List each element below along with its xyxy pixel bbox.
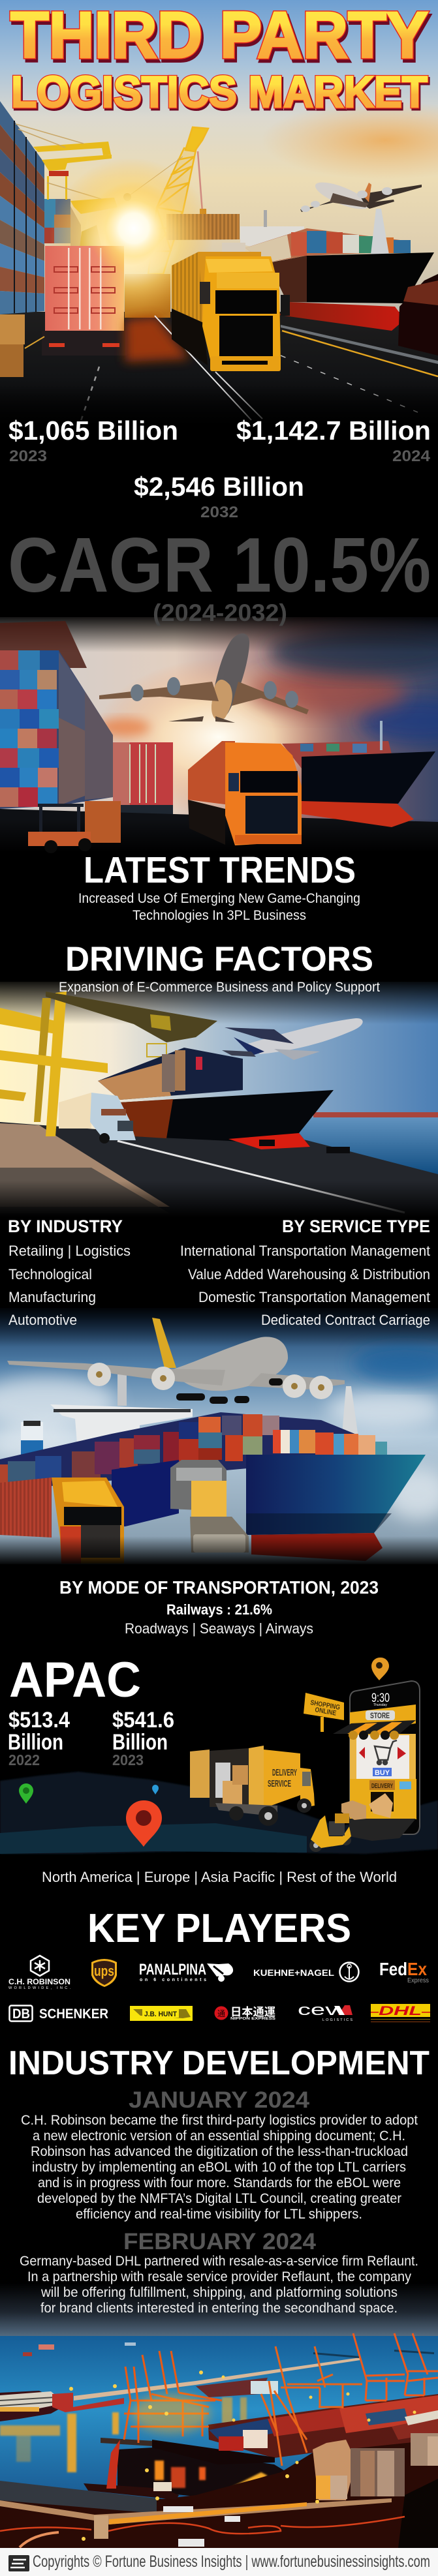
quay wall <box>0 2481 157 2513</box>
segment: by industry: BY INDUSTRY <box>8 1217 123 1236</box>
panel: harbour at night <box>0 2283 438 2548</box>
value 2023 <box>8 416 178 465</box>
map silhouette <box>0 1772 438 1854</box>
silos <box>313 2433 438 2500</box>
illustration: shopping online sign: ONLINE <box>314 1706 337 1718</box>
airplane <box>99 633 309 723</box>
panel: sunset logistics scene <box>0 613 438 853</box>
pin blue <box>152 1785 159 1795</box>
illustration: delivery truck: DELIVERY <box>272 1767 297 1778</box>
locomotive <box>170 1460 249 1553</box>
value 2032: $2,546 Billion <box>134 472 304 502</box>
service type list <box>180 1243 430 1328</box>
illustration: scooter <box>309 1813 351 1852</box>
road markings <box>25 316 438 421</box>
APAC value 2023: 2023 <box>112 1751 144 1768</box>
February paragraph <box>20 2254 418 2316</box>
logo: DB Schenker <box>9 2005 108 2022</box>
gantry crane <box>0 992 217 1136</box>
illustration: phone store <box>333 1658 420 1841</box>
bridge pier <box>94 2515 108 2539</box>
distant trucks <box>125 274 170 318</box>
segment: by service type <box>180 1217 430 1328</box>
yard containers <box>209 2395 438 2443</box>
store button: STORE <box>370 1711 390 1720</box>
sun glow <box>95 659 343 815</box>
right middle cranes <box>261 2346 362 2466</box>
logos <box>8 1956 430 2022</box>
ship containers <box>245 209 411 263</box>
logo: FedEx <box>379 1959 429 1984</box>
red clouds <box>248 669 405 714</box>
bottom fade <box>0 1181 438 1217</box>
top fade <box>0 978 438 1024</box>
illustration: delivery truck <box>190 1746 315 1826</box>
fade into black <box>0 385 438 431</box>
service type list: Domestic Transportation Management <box>198 1289 430 1305</box>
red trailer <box>113 742 173 822</box>
logo: J.B. Hunt <box>130 2006 193 2021</box>
bollards <box>259 1140 350 1153</box>
title <box>10 0 430 119</box>
APAC value 2022 <box>8 1708 70 1768</box>
footer background <box>0 2548 438 2576</box>
value 2032: 2032 <box>200 504 238 521</box>
clock <box>371 1691 390 1707</box>
February paragraph: In a partnership with resale service provider Reflaunt, the company <box>27 2269 411 2284</box>
logo: UPS <box>91 1959 117 1987</box>
segment: by service type: BY SERVICE TYPE <box>282 1217 430 1236</box>
industry list: Retailing | Logistics <box>8 1243 131 1259</box>
industry list: Technological <box>8 1266 92 1282</box>
shop window <box>356 1735 409 1779</box>
driving factor description: Expansion of E-Commerce Business and Policy Support <box>59 980 380 995</box>
small ships <box>23 2342 136 2356</box>
pontoon <box>101 2438 153 2446</box>
map lower glow <box>0 1823 307 1854</box>
distant stack <box>44 199 81 249</box>
January paragraph: industry by implementing an eBOL with 10 of the top LTL carriers <box>32 2160 406 2175</box>
truck cab <box>52 1477 124 1564</box>
sky <box>0 982 438 1132</box>
harbour lights <box>69 2371 416 2541</box>
second vessel right <box>398 274 438 356</box>
APAC value 2022: 2022 <box>8 1751 40 1768</box>
dock surface <box>0 1122 438 1220</box>
railways share: Railways : 21.6% <box>166 1601 272 1618</box>
logo: UPS: ups <box>94 1963 114 1979</box>
panel: hero port scene <box>0 0 438 431</box>
gantry crane yellow <box>16 124 117 248</box>
development: February 2024: FEBRUARY 2024 <box>123 2229 317 2254</box>
region heading: APAC <box>8 1652 174 1768</box>
development: January 2024: JANUARY 2024 <box>129 2087 310 2113</box>
land <box>0 2440 438 2548</box>
road <box>0 312 438 431</box>
location pin <box>371 1658 389 1680</box>
value 2024: $1,142.7 Billion <box>236 416 431 446</box>
white ship on pier <box>251 2381 278 2394</box>
heading: key players: KEY PLAYERS <box>87 1906 351 1951</box>
title line 1: THIRD PARTY <box>12 2 430 75</box>
road base <box>0 809 438 851</box>
forklift and crates <box>28 801 121 853</box>
logo: Nippon Express: 通 <box>217 2009 225 2018</box>
panel: cargo ship, train, truck and plane scene <box>0 1305 438 1577</box>
sun over trailer <box>87 181 181 275</box>
transport modes: Roadways | Seaways | Airways <box>125 1620 313 1637</box>
top fade <box>0 613 438 652</box>
development: February 2024 <box>20 2229 418 2316</box>
logo: J.B. Hunt: J.B. HUNT <box>144 2010 177 2018</box>
February paragraph: will be offering fulfillment, shipping, and platforming solutions <box>40 2285 398 2300</box>
panel: world map base <box>0 1772 438 1854</box>
delivery tag <box>369 1780 395 1790</box>
distant train <box>313 1112 438 1117</box>
logo: Nippon Express: NIPPON EXPRESS <box>230 2017 275 2021</box>
ship hull <box>120 1090 334 1147</box>
segment: mode of transportation <box>59 1577 379 1637</box>
small vessel <box>84 2440 179 2500</box>
water reflections <box>0 2397 247 2472</box>
trucks on road <box>163 2506 240 2547</box>
airplane <box>300 177 422 215</box>
heading: driving factors: DRIVING FACTORS <box>65 940 373 978</box>
heading: latest trends <box>78 849 360 923</box>
centre reflection shadow <box>117 2447 287 2498</box>
centre reflections <box>155 2461 268 2493</box>
store header <box>350 1705 416 1735</box>
pier containers <box>52 2393 124 2412</box>
sky <box>0 0 438 326</box>
phone body <box>350 1681 420 1834</box>
red arrows <box>359 1747 406 1759</box>
February paragraph: for brand clients interested in entering the secondhand space. <box>40 2301 398 2316</box>
container stack left <box>0 101 44 314</box>
January paragraph: efficiency and real-time visibility for LTL shippers. <box>76 2207 362 2222</box>
logo: DB Schenker: SCHENKER <box>39 2007 108 2022</box>
industry list: Manufacturing <box>8 1289 96 1305</box>
red trailer <box>0 1477 52 1538</box>
APAC value 2023: Billion <box>112 1730 168 1755</box>
logo: C.H. Robinson <box>8 1956 70 1990</box>
quay shadow <box>0 1168 170 1213</box>
sky <box>0 1308 438 1566</box>
quay kerb <box>281 325 438 364</box>
heading: driving factors <box>59 940 380 995</box>
top fade <box>0 1305 438 1347</box>
logo: DHL <box>371 2004 430 2022</box>
hull red bow <box>228 1133 310 1149</box>
shopping cart <box>375 1740 397 1765</box>
delivery tag: DELIVERY <box>371 1783 393 1790</box>
moored tanker <box>152 2430 275 2464</box>
road line <box>117 1141 405 1213</box>
illustration: shopping online sign: SHOPPING <box>309 1699 341 1712</box>
footer <box>0 2548 438 2576</box>
ground <box>0 1564 438 1577</box>
ship superstructure <box>222 210 304 256</box>
trend description: Increased Use Of Emerging New Game-Changing <box>78 891 360 906</box>
parcel tilted <box>369 1793 393 1818</box>
value 2024: 2024 <box>392 447 431 465</box>
heading: industry development: INDUSTRY DEVELOPMENT <box>8 2044 430 2082</box>
clouds <box>0 1376 438 1520</box>
land dark right <box>398 2479 438 2548</box>
logo: CEVA <box>298 2001 352 2022</box>
hull red stripe <box>279 302 405 331</box>
development: January 2024 <box>21 2087 418 2222</box>
orange clouds <box>98 718 150 736</box>
ship containers <box>98 1048 243 1100</box>
logo: FedEx: Express <box>407 1977 429 1984</box>
ship <box>282 721 435 827</box>
illustration: shopping online sign <box>304 1693 344 1732</box>
phone lower panel <box>350 1779 416 1819</box>
logo: Panalpina: on 6 continents <box>140 1978 206 1982</box>
bridge lit section <box>109 2502 307 2524</box>
delivery slot <box>371 1792 394 1811</box>
APAC value 2022: $513.4 <box>8 1708 70 1733</box>
logo: Nippon Express: 日本通運 <box>230 2006 275 2018</box>
January paragraph: Robinson has advanced the digitization of the less-than-truckload <box>31 2144 408 2159</box>
central cranes <box>124 2351 222 2443</box>
logo: DHL: DHL <box>379 2005 422 2018</box>
January paragraph <box>21 2113 418 2222</box>
deck containers <box>0 1412 387 1491</box>
January paragraph: C.H. Robinson became the first third-party logistics provider to adopt <box>21 2113 418 2128</box>
hull orange side <box>120 1099 173 1138</box>
logo: DB Schenker: DB <box>12 2007 30 2022</box>
pin green <box>19 1783 33 1804</box>
ground fade <box>0 1536 438 1566</box>
value 2023: $1,065 Billion <box>8 416 178 446</box>
lower black <box>0 1217 438 1223</box>
logo: C.H. Robinson: WORLDWIDE, INC. <box>8 1986 70 1990</box>
logo: Kuehne+Nagel: KUEHNE+NAGEL <box>253 1967 334 1978</box>
orange truck <box>188 741 302 845</box>
cool dark cloud right <box>359 698 438 744</box>
water <box>0 2336 438 2499</box>
segment: mode of transportation: BY MODE OF TRANSPORTATION, 2023 <box>59 1577 379 1598</box>
stage <box>349 1819 416 1841</box>
industry list: Automotive <box>8 1312 77 1328</box>
sea <box>299 1117 438 1176</box>
hull brown flank <box>268 256 307 302</box>
value 2024 <box>236 416 431 465</box>
buy button: BUY <box>375 1769 390 1777</box>
awning <box>333 1720 416 1740</box>
pink container truck <box>42 246 127 356</box>
APAC value 2023: $541.6 <box>112 1708 174 1733</box>
pin red <box>126 1800 162 1847</box>
sun flare <box>50 158 213 321</box>
clock: 9:30 <box>371 1691 390 1705</box>
breakwater strips <box>313 2350 434 2358</box>
January paragraph: developed by the NMFTA’s Digital LTL Council, creating greater <box>37 2191 401 2206</box>
airplane <box>7 1318 345 1404</box>
value 2023: 2023 <box>9 447 47 465</box>
terminal roof <box>0 621 87 668</box>
hull lower dark band <box>246 1513 392 1535</box>
value 2032 <box>134 472 304 521</box>
logo: C.H. Robinson: C.H. ROBINSON <box>8 1978 70 1986</box>
upper dark cloud right <box>268 629 438 675</box>
market values <box>8 416 431 626</box>
white truck <box>59 1093 136 1144</box>
February paragraph: Germany-based DHL partnered with resale-as-a-service firm Reflaunt. <box>20 2254 418 2269</box>
panel: port and plane scene <box>0 978 438 1223</box>
logo: CEVA: LOGISTICS <box>322 2018 352 2022</box>
sunset sky <box>0 617 438 832</box>
central crane glow <box>132 2394 210 2433</box>
tower crane <box>123 127 208 274</box>
heading: latest trends: LATEST TRENDS <box>84 849 356 891</box>
card <box>399 1781 411 1789</box>
logo: FedEx: Fed <box>379 1959 407 1979</box>
hanging container <box>166 214 240 240</box>
trend description: Technologies In 3PL Business <box>133 908 306 923</box>
hull red waterline <box>251 1533 383 1561</box>
APAC value 2022: Billion <box>8 1730 63 1755</box>
trend description <box>78 891 360 923</box>
logo: CEVA: cev <box>298 2001 338 2019</box>
locomotive carriage <box>112 1460 179 1526</box>
January paragraph: a new electronic version of an essential shipping document; C.H. <box>33 2129 405 2144</box>
logo: Panalpina: PANALPINA <box>139 1961 206 1978</box>
parcel on floor <box>341 1800 366 1820</box>
ship mast <box>341 1386 360 1451</box>
service type list: International Transportation Management <box>180 1243 430 1259</box>
logo: FedEx: Ex <box>407 1959 427 1979</box>
road glow <box>125 316 189 362</box>
blue sky right <box>352 1344 438 1383</box>
ship hull <box>246 1455 426 1535</box>
yellow truck <box>172 252 290 371</box>
January paragraph: and is in progress with four more. Standards for the eBOL were <box>38 2175 401 2190</box>
clock: Thursday <box>373 1703 387 1707</box>
APAC value 2023 <box>112 1708 174 1768</box>
footer logo <box>8 2555 29 2571</box>
buy button <box>373 1768 392 1777</box>
ship hull <box>268 252 434 303</box>
far pier yard <box>196 2378 268 2397</box>
boxes left <box>0 314 25 377</box>
warm cloud glow <box>261 101 438 179</box>
service type list: Dedicated Contract Carriage <box>261 1312 430 1328</box>
regions list: North America | Europe | Asia Pacific | Rest of the World <box>42 1869 397 1885</box>
ship superstructure <box>21 1373 193 1456</box>
dusk sky <box>0 2283 438 2336</box>
cruise ship <box>0 2391 70 2421</box>
shop wall <box>350 1734 416 1781</box>
red roads <box>0 2517 405 2547</box>
second vessel red <box>403 280 438 305</box>
container wall <box>0 650 113 809</box>
logo: Kuehne+Nagel <box>253 1962 359 1982</box>
far pier <box>74 2357 360 2401</box>
region heading: APAC: APAC <box>9 1652 141 1708</box>
CAGR: (2024-2032) <box>153 599 287 626</box>
yard <box>208 2394 438 2458</box>
logo: Nippon Express <box>214 2006 275 2021</box>
bridge <box>0 2498 392 2524</box>
road fade <box>0 819 438 853</box>
airplane <box>222 1018 363 1060</box>
right cranes <box>353 2333 438 2401</box>
segment: by industry <box>8 1217 131 1328</box>
illustration: delivery truck: SERVICE <box>268 1778 291 1789</box>
sunlit quay <box>0 1123 170 1207</box>
industry list <box>8 1243 131 1328</box>
